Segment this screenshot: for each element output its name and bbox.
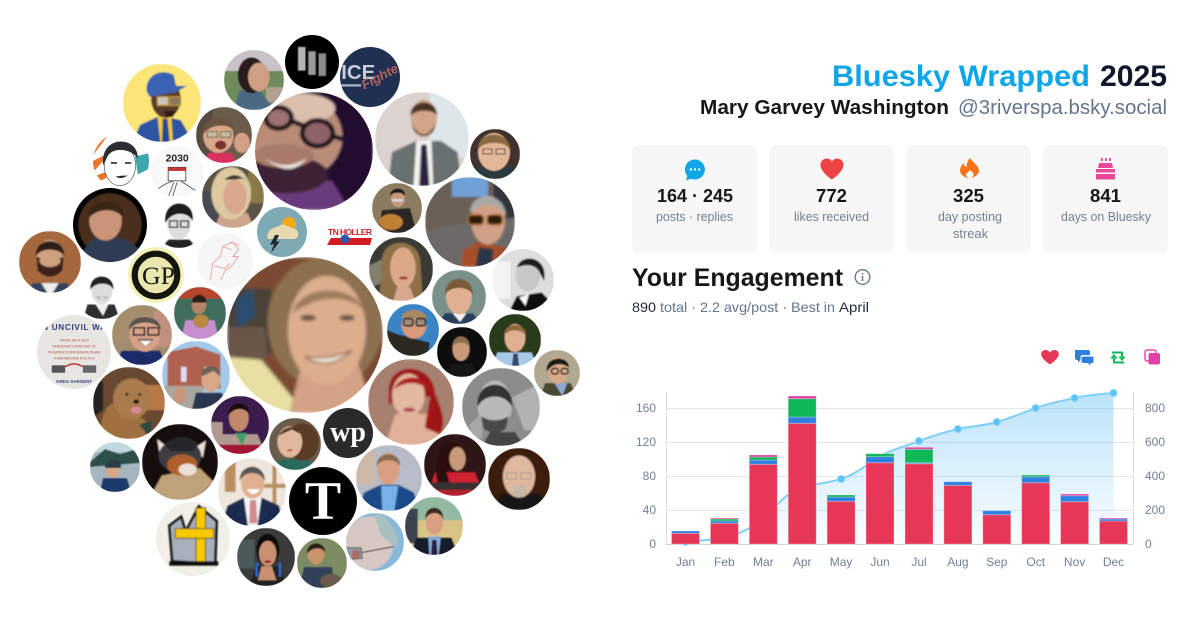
icon: quotes squares <box>1145 350 1160 364</box>
avatar: ICE logo: Fighter <box>359 58 406 92</box>
icon: reposts arrows <box>1112 352 1124 362</box>
engagement summary: total · 2.2 avg/post · Best in <box>660 299 835 315</box>
avatar: An Uncivil War book cover: AN UNCIVIL WAR <box>36 323 113 332</box>
avatar: man with green lanyard on TV <box>211 396 269 454</box>
avatar: man in dark shirt <box>437 327 487 377</box>
stat card: likes received: likes received <box>794 210 869 224</box>
avatar: laughing man with floral tie <box>218 458 287 526</box>
month labels: Jun <box>870 555 890 569</box>
avatar: man in gray suit <box>375 92 469 186</box>
right axis labels <box>1145 401 1165 551</box>
avatar: cartoon man with blue cap <box>123 64 201 142</box>
avatar: man with thick glasses, blue background <box>387 304 439 356</box>
month labels: Feb <box>714 555 735 569</box>
user name and handle <box>700 96 1167 119</box>
month labels <box>676 555 1124 569</box>
title: 2025 <box>1100 60 1167 93</box>
month labels: Jul <box>911 555 927 569</box>
stat card: days on Bluesky <box>1043 145 1168 253</box>
avatar: GP monogram <box>128 247 184 303</box>
avatar: black-and-white man with glasses <box>164 202 194 248</box>
stat card: day posting streak: day posting <box>938 210 1002 224</box>
month labels: Apr <box>793 555 812 569</box>
stat card: days on Bluesky: 841 <box>1090 186 1121 206</box>
stat card: posts and replies <box>632 145 757 253</box>
right axis labels: 600 <box>1145 435 1165 449</box>
left axis labels: 120 <box>636 435 656 449</box>
month labels: Nov <box>1064 555 1085 569</box>
icon: chat bubble <box>685 159 705 180</box>
avatar: person with cap at mountain lake <box>90 442 140 492</box>
left axis labels: 80 <box>643 469 656 483</box>
avatar: An Uncivil War book cover: THUNDERDOME POLITICS <box>53 356 96 360</box>
avatar: 2030 calendar sketch: 2030 <box>166 154 189 165</box>
cumulative line <box>686 393 1114 542</box>
stat card: posts and replies: 164 · 245 <box>657 186 733 206</box>
stat card: likes received <box>769 145 894 253</box>
right axis labels: 400 <box>1145 469 1165 483</box>
avatar: man in blue shirt and tie <box>489 314 541 366</box>
month labels: Oct <box>1026 555 1046 569</box>
cumulative points <box>682 390 1117 546</box>
left axis labels: 0 <box>649 537 656 551</box>
icon: flame <box>960 158 979 178</box>
avatar: man in blue jacket <box>356 445 422 511</box>
avatar: illustrated man in suit, grayscale <box>84 276 118 319</box>
avatar: An Uncivil War book cover <box>36 315 113 389</box>
stat card: days on Bluesky: days on Bluesky <box>1061 210 1152 224</box>
stat card: day posting streak: streak <box>953 227 989 241</box>
right axis labels: 200 <box>1145 503 1165 517</box>
avatar: person with gray-blue hair and glasses <box>345 513 404 571</box>
avatar: An Uncivil War book cover: TAKING BACK OUR <box>59 339 90 343</box>
right axis labels: 800 <box>1145 401 1165 415</box>
avatar: woman in car waving <box>196 107 252 163</box>
avatar: bald man with glasses <box>488 448 550 510</box>
avatar: man with cat outdoors <box>297 538 347 588</box>
avatar: man with dark glasses and blazer <box>534 350 580 396</box>
avatar: black-and-white profile man <box>492 249 554 311</box>
left axis labels: 40 <box>643 503 656 517</box>
avatar: GP monogram: GP <box>142 261 175 290</box>
avatar: sketch of figure on white <box>197 233 253 289</box>
engagement chart <box>636 390 1165 569</box>
avatar: man in suit at sunset <box>405 497 463 555</box>
avatar: man with harmonica and guitar <box>372 183 422 233</box>
avatar: man in dark circle frame <box>73 188 147 262</box>
avatar: woman on TV in red <box>424 434 486 496</box>
engagement summary: 890 <box>632 299 656 315</box>
avatar: woman in denim jacket <box>224 50 284 110</box>
month labels: May <box>830 555 852 569</box>
avatar: man with dark glasses, purple tint <box>243 92 373 210</box>
avatar: An Uncivil War book cover: DEMOCRACY IN AN AGE OF <box>52 345 96 349</box>
avatar: woman with long red hair <box>368 359 454 445</box>
month labels: Jan <box>676 555 695 569</box>
stat card: day posting streak: 325 <box>953 186 984 206</box>
avatar: bearded man against brick <box>19 231 81 293</box>
icon: birthday cake <box>1096 158 1115 180</box>
avatar cluster <box>19 35 580 588</box>
month labels: Aug <box>947 555 969 569</box>
avatar: An Uncivil War book cover: GREG SARGENT <box>56 379 92 384</box>
avatar: golden curly dog <box>93 367 165 439</box>
avatar: TN Holler logo: TN HOLLER <box>328 227 372 237</box>
icon: likes heart <box>1041 350 1059 364</box>
stacked bars <box>672 396 1128 544</box>
avatar: mitre with yellow cross <box>156 502 230 576</box>
month labels: Mar <box>753 555 774 569</box>
stat card: posts and replies: posts · replies <box>656 210 733 224</box>
month labels: Sep <box>986 555 1008 569</box>
avatar: New York Times logo: T <box>305 471 341 531</box>
avatar: man in front of brick church <box>162 341 230 409</box>
avatar: smiling man with glasses, navy shirt <box>112 305 172 365</box>
stat card: day posting streak <box>906 145 1031 253</box>
avatar: 2030 calendar sketch <box>158 154 196 196</box>
avatar: man in suit with teal background <box>432 270 486 324</box>
avatar: storm cloud icon <box>257 207 307 257</box>
avatar: woman with curly hair <box>269 418 321 470</box>
avatar: man with food in purple shirt <box>174 287 226 339</box>
left axis labels <box>636 401 656 551</box>
icon: replies bubbles <box>1075 350 1094 366</box>
icon: info <box>855 270 870 284</box>
avatar: New York Times logo <box>289 467 357 535</box>
left axis labels: 160 <box>636 401 656 415</box>
stat card: likes received: 772 <box>816 186 847 206</box>
avatar: WP logo <box>323 408 373 458</box>
avatar: TN Holler logo <box>327 227 372 245</box>
avatar: illustrated man, orange and teal <box>93 136 149 186</box>
chart gridlines and axes <box>666 392 1134 544</box>
right axis labels: 0 <box>1145 537 1152 551</box>
engagement summary: April <box>839 299 869 315</box>
avatar: round-faced man with glasses <box>470 129 520 179</box>
avatar: woman with blue earrings <box>237 528 295 586</box>
user name and handle: @3riverspa.bsky.social <box>958 96 1167 119</box>
avatar: ICE logo <box>340 47 406 107</box>
heading: your engagement: Your Engagement <box>632 264 844 292</box>
icon: heart <box>820 158 844 180</box>
avatar: man with sunglasses in old town <box>425 177 515 267</box>
avatar: woman with long hair <box>369 237 433 301</box>
title: Bluesky Wrapped <box>832 60 1090 93</box>
avatar: grayscale bearded man <box>462 368 540 446</box>
avatar: W logo <box>285 35 339 89</box>
avatar: An Uncivil War book cover: TRUMPIAN DISINFORMATION AND <box>47 350 101 354</box>
month labels: Dec <box>1103 555 1124 569</box>
cumulative area <box>686 393 1114 544</box>
avatar: large photo of smiling woman <box>227 257 383 413</box>
avatar: WP logo: wp <box>330 417 366 448</box>
chart legend <box>1041 350 1160 366</box>
avatar: red panda in costume <box>142 424 218 500</box>
avatar: blonde woman <box>202 166 264 228</box>
user name and handle: Mary Garvey Washington <box>700 97 949 119</box>
avatar: ICE logo: ICE <box>341 62 375 84</box>
